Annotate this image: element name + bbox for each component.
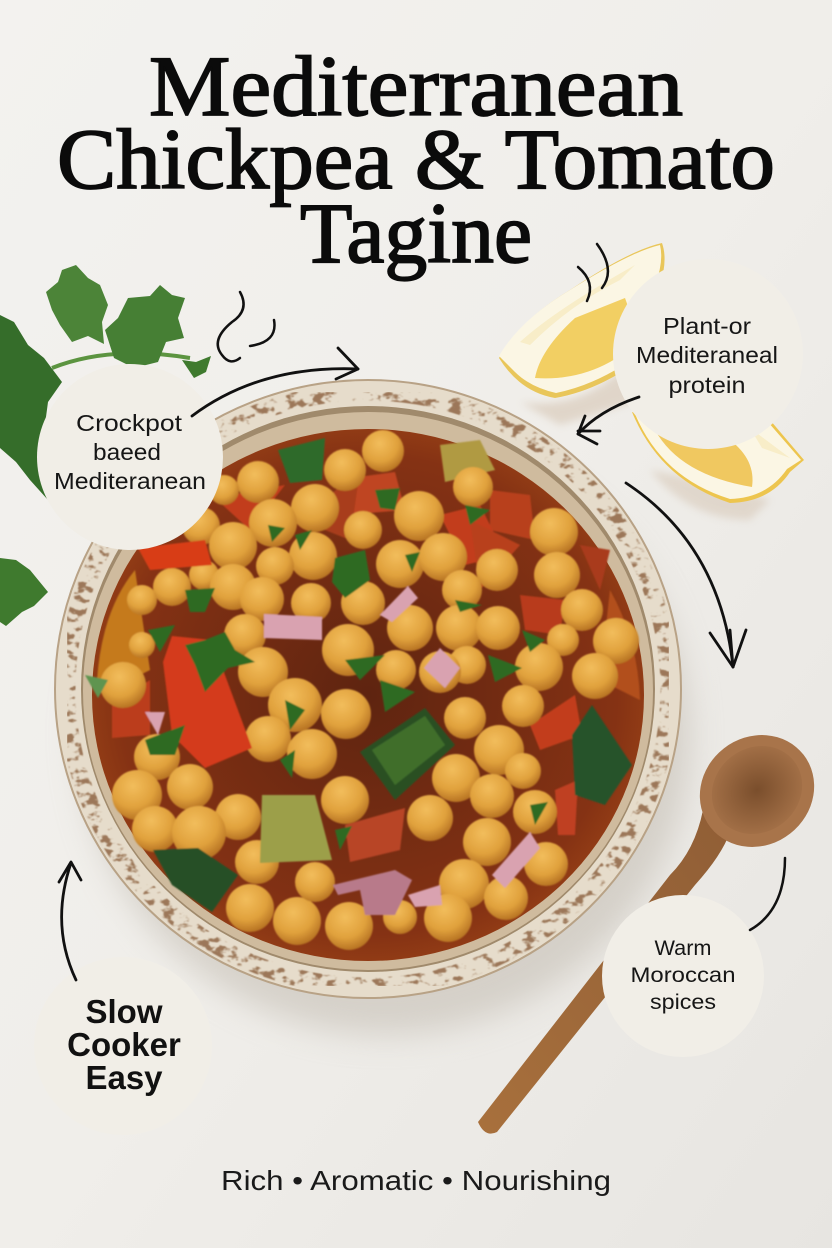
- title: Mediterranean: [149, 38, 683, 134]
- callout: spices: Warm: [654, 937, 712, 960]
- icon: wooden spoon: [478, 712, 832, 1134]
- bowl rim: [55, 380, 681, 998]
- chickpeas: [100, 430, 639, 950]
- tomato strip: [138, 540, 212, 570]
- callout: crockpot: baeed: [93, 439, 161, 465]
- arrow: spices callout connector: [750, 858, 785, 930]
- sauce: [92, 429, 644, 961]
- callout: spices: spices: [650, 991, 716, 1014]
- tagline: Rich • Aromatic • Nourishing: [221, 1165, 611, 1196]
- title: Tagine: [300, 185, 532, 281]
- tomato big piece: [163, 636, 252, 768]
- arrow: bowl to spoon: [626, 483, 746, 667]
- green pieces under chickpeas: [278, 438, 495, 483]
- callout: slow cooker easy: Slow: [85, 993, 163, 1030]
- red onion pieces: [145, 586, 540, 915]
- arrow: crockpot callout to bowl: [192, 348, 358, 416]
- callout: crockpot: Mediteranean: [54, 468, 206, 494]
- title: Chickpea & Tomato: [57, 111, 775, 207]
- callout: crockpot: [37, 364, 223, 550]
- callout: slow cooker easy: Cooker: [67, 1026, 181, 1063]
- icon: lemon wedge lower: [632, 412, 804, 520]
- tomato pieces under chickpeas: [112, 470, 610, 862]
- callout: spices: Moroccan: [630, 964, 736, 987]
- callout: protein: [613, 259, 803, 449]
- arrow: protein callout to bowl: [578, 397, 639, 444]
- icon: steam squiggle left: [218, 292, 274, 361]
- callout: protein: Plant-or: [663, 313, 751, 339]
- callout: slow cooker easy: [34, 957, 212, 1135]
- callout: slow cooker easy: Easy: [85, 1059, 163, 1096]
- callout: protein: Mediteraneal: [636, 342, 778, 368]
- icon: lemon wedge upper: [499, 243, 665, 425]
- title: [57, 38, 775, 281]
- bowl with tagine: [55, 380, 681, 998]
- callout: crockpot: Crockpot: [76, 410, 183, 436]
- zucchini pieces: [153, 705, 632, 912]
- callout: protein: protein: [668, 372, 746, 398]
- bowl shadow: [80, 435, 690, 1035]
- parsley flecks: [85, 488, 548, 850]
- icon: steam squiggle right: [578, 244, 608, 301]
- callout: spices: [602, 895, 764, 1057]
- icon: cilantro sprig: [0, 265, 211, 626]
- arrow: slow cooker callout to bowl: [59, 862, 81, 980]
